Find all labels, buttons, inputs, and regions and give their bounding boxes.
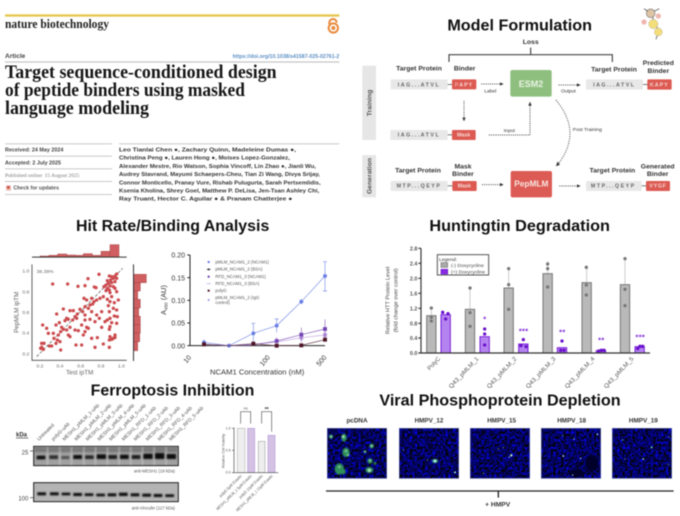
- bar chart: relative cell viability: [215, 406, 278, 512]
- bar chart: relative cell viability: 1.0: [226, 426, 231, 430]
- grey bars: [427, 274, 630, 353]
- bar chart: relative cell viability: Relative Cell Viability: [222, 434, 226, 468]
- scatter axis labels: 0.6: [77, 363, 84, 369]
- publication dates: Accepted: 2 July 2025: [5, 160, 61, 166]
- bar chart: relative cell viability: ns: [244, 406, 248, 411]
- chart legend: pMLM_NCAM1_2 (NCAM1): [215, 259, 270, 264]
- y axis title: (fold change over control): [393, 268, 399, 332]
- purple bars: [441, 315, 644, 353]
- training row: target and binder: [391, 66, 476, 89]
- generation row: target and mask: Binder: [452, 171, 474, 178]
- box: ESM2: [510, 70, 552, 97]
- x labels: Q43_pMLM_1: [448, 356, 481, 390]
- arrow: post training: [556, 100, 602, 166]
- top histogram: [32, 245, 127, 257]
- image labels: pcDNA: [346, 417, 368, 424]
- axes: [418, 248, 650, 353]
- box: PepMLM: PepMLM: [514, 179, 549, 189]
- x labels: Q43_pMLM_3: [525, 356, 558, 390]
- lane labels: MESH1_pMLM_5-uAb: [108, 403, 148, 442]
- icon: open access: [329, 19, 338, 33]
- scatter axis labels: 0.8: [98, 363, 105, 369]
- y tick labels: 0.8: [410, 321, 417, 327]
- line chart: 0.05: [171, 321, 185, 328]
- generated binder output: [586, 163, 675, 191]
- author list: Ray Truant, Hector C. Aguilar ● & Pranam Chatterjee ●: [119, 197, 292, 203]
- arrow: PepMLM output: [559, 184, 581, 188]
- side label: generation: Generation: [367, 158, 374, 194]
- image labels: HMPV_19: [629, 417, 658, 424]
- predicted binder output: IAG...ATVL: [593, 83, 636, 89]
- chart legend: pMLM_NCAM1_2 (BSA): [215, 267, 263, 272]
- lane labels: MESH1_RFD_1-uAb: [121, 405, 158, 442]
- bar chart: HTT protein level: [385, 246, 650, 390]
- scatter axis labels: 0.4: [57, 363, 64, 369]
- micrograph: HMPV_12: [399, 428, 459, 478]
- arrow: input to ESM2: Input: [504, 128, 515, 134]
- treatment bracket: [326, 491, 674, 508]
- arrow: ESM2 output: Output: [561, 89, 576, 95]
- x labels: Q43_pMLM_5: [603, 356, 636, 390]
- y tick labels: 2.8: [410, 246, 417, 252]
- masked training row: Mask: [457, 133, 470, 139]
- scatter axis labels: 0.2: [22, 351, 30, 357]
- panel: viral phosphoprotein depletion: [326, 393, 674, 508]
- scatter axis labels: 0.6: [22, 310, 30, 316]
- micrograph: HMPV_15: [470, 428, 530, 478]
- generated binder output: MTP...QEYP: [591, 184, 636, 190]
- x labels: PolyC: [427, 356, 443, 372]
- scatter axis labels: 0.4: [22, 331, 30, 337]
- author list: Audrey Stavrand, Mayumi Schaepers-Cheu, Tian Zi Wang, Divya Srijay,: [119, 172, 320, 178]
- loss bracket: [449, 48, 612, 62]
- chart legend: polyG: [215, 288, 227, 293]
- article title: Target sequence-conditioned design: [5, 62, 277, 83]
- author list: Alexander Mestre, Rio Watson, Sophia Vincoff, Lin Zhao ●, Jianli Wu,: [119, 164, 316, 170]
- line chart: 0.10: [171, 298, 185, 305]
- lane labels: polyG-uAb: [51, 421, 72, 442]
- treatment bracket: + HMPV: [485, 501, 511, 508]
- line chart: NCAM1 Concentration (nM): [210, 367, 305, 376]
- lane labels: MESH1_RFD_4-uAb: [157, 405, 194, 442]
- loss label: Loss: [523, 39, 539, 46]
- author list: [119, 148, 321, 203]
- generated binder output: VYGF: [649, 184, 667, 190]
- scatter axis labels: 0.2: [37, 363, 44, 369]
- lane labels: MESH1_RFD_5-uAb: [168, 405, 205, 442]
- generated binder output: Target Protein: [589, 167, 635, 174]
- chart legend: (+) Doxycycline: [451, 269, 485, 275]
- training row: target and binder: IAG...ATVL: [398, 82, 440, 88]
- x labels: Q43_pMLM_2: [486, 356, 519, 390]
- article title: language modeling: [5, 98, 150, 119]
- box: PepMLM: [511, 171, 552, 197]
- article title: of peptide binders using masked: [5, 80, 246, 101]
- training row: target and binder: PAPY: [455, 82, 473, 88]
- significance marks: **: [559, 327, 566, 336]
- micrograph: HMPV_19: [612, 428, 672, 478]
- training row: target and binder: Target Protein: [396, 66, 442, 73]
- predicted binder output: [586, 60, 674, 90]
- lane labels: MESH1_pMLM_2-uAb: [74, 403, 113, 442]
- panel: article header: [5, 14, 339, 203]
- generation row: target and mask: MTP...QEYP: [397, 184, 441, 190]
- heading: model formulation: Model Formulation: [447, 18, 592, 35]
- series: dark: [202, 338, 327, 347]
- y tick labels: 1.6: [410, 291, 417, 297]
- line chart: 450: [163, 302, 168, 310]
- lane labels: Untreated: [36, 423, 56, 442]
- image labels: [346, 417, 658, 424]
- y axis title: Relative HTT Protein Level: [385, 267, 391, 334]
- line chart: 0.00: [171, 343, 185, 350]
- masked training row: [390, 130, 476, 140]
- generation row: target and mask: [391, 163, 477, 191]
- side label: training: [362, 66, 376, 140]
- series: purple: [204, 319, 327, 346]
- x labels: [427, 356, 636, 390]
- author list: Leo Tianlai Chen ●, Zachary Quinn, Madeleine Dumas ●,: [119, 148, 296, 154]
- icon: mascot: [641, 9, 662, 39]
- article title: [5, 62, 277, 119]
- grey data points: [430, 257, 627, 328]
- chart legend: (-) Doxycycline: [451, 263, 484, 269]
- generation row: target and mask: Mask: [454, 163, 472, 170]
- panel: hit rate and binding analysis: [14, 218, 329, 377]
- side label: training: Training: [367, 90, 374, 116]
- line chart: [159, 253, 329, 376]
- publication dates: Received: 24 May 2024: [5, 148, 64, 154]
- significance marks: ***: [636, 332, 645, 341]
- scatter axis labels: PepMLM ipTM: [14, 292, 21, 333]
- significance marks: ***: [519, 327, 528, 336]
- y tick labels: [410, 246, 417, 357]
- y tick labels: 2.0: [410, 276, 417, 282]
- western blot: MESH1: 25: [22, 451, 29, 457]
- panel: ferroptosis inhibition: [16, 383, 278, 512]
- series: pale purple: [204, 330, 327, 346]
- author list: Connor Monticello, Pranay Vure, Rishab Pulugurta, Sarah Pertsemlidis,: [119, 180, 321, 186]
- chart legend: RFD_NCAM1_3 (BSA): [215, 281, 260, 286]
- bar chart: relative cell viability: MESH1_pMLM_1 10μM Erastin: [235, 474, 274, 512]
- western blot: vinculin: anti-Vinculin (117 kDa): [132, 505, 176, 510]
- predicted binder output: Binder: [648, 68, 669, 75]
- chart legend: [437, 255, 489, 275]
- scatter axis labels: 0.8: [22, 289, 30, 295]
- grey error bars: [431, 258, 625, 329]
- publication dates: Check for updates: [13, 186, 59, 192]
- generated binder output: Generated: [641, 163, 675, 170]
- y tick labels: 0.4: [410, 336, 417, 342]
- scatter axis labels: Test ipTM: [66, 370, 93, 377]
- scatter axis labels: 1.0: [118, 363, 125, 369]
- line chart: A: [159, 310, 168, 315]
- lane labels: MESH1_RFD_3-uAb: [145, 405, 182, 442]
- training row: target and binder: Binder: [454, 66, 476, 73]
- lane labels: MESH1_pMLM_3-uAb: [85, 403, 125, 442]
- significance marks: [483, 315, 645, 344]
- panel: model formulation: [362, 9, 675, 197]
- arrow: post training: Post Training: [573, 127, 602, 133]
- micrograph: pcDNA: [327, 428, 387, 478]
- chart legend: control): [215, 300, 230, 305]
- predicted binder output: Predicted: [643, 60, 674, 67]
- publication dates: Published online: 15 August 2025: [5, 173, 79, 179]
- y tick labels: 0.0: [410, 351, 417, 357]
- arrow: binder to ESM2: [481, 82, 504, 95]
- generated binder output: Binder: [647, 171, 669, 178]
- article label: Article: [5, 53, 26, 60]
- journal name: nature biotechnology: [5, 17, 110, 31]
- arrow: mask step: [462, 101, 466, 121]
- arrow: binder to ESM2: Label: [484, 89, 496, 95]
- chart legend: pMLM_NCAM1_2 (IgG: [215, 295, 260, 300]
- doi link: https://doi.org/10.1038/s41587-025-02761-2: [233, 54, 339, 60]
- predicted binder output: Target Protein: [591, 66, 637, 73]
- bar chart: relative cell viability: 0.0: [226, 471, 231, 475]
- heading: viral: Viral Phosphoprotein Depletion: [379, 393, 621, 410]
- lane labels: MESH1_pMLM_1-uAb: [62, 403, 101, 442]
- significance marks: *: [483, 315, 486, 324]
- arrow: ESM2 output: [559, 83, 581, 95]
- micrograph: HMPV_18: [541, 428, 601, 478]
- image labels: HMPV_18: [557, 417, 587, 424]
- significance marks: **: [598, 335, 605, 344]
- side label: generation: [362, 155, 376, 197]
- western blot: MESH1: anti-MESH1 (19 kDa): [134, 469, 176, 474]
- western blot: vinculin: [18, 483, 178, 510]
- line chart: 100: [259, 354, 272, 368]
- predicted binder output: KAPY: [650, 83, 669, 89]
- generation row: target and mask: Mask: [458, 184, 471, 190]
- line chart: 0.15: [171, 275, 185, 282]
- scatter axis labels: [14, 269, 125, 377]
- author list: Ksenia Kholina, Shrey Goel, Matthew P. DeLisa, Jen-Tsan Ashley Chi,: [119, 189, 320, 195]
- lane labels: [36, 403, 205, 442]
- lane labels: MESH1_RFD_2-uAb: [133, 405, 170, 442]
- kDa label: kDa: [16, 432, 28, 438]
- y tick labels: 1.2: [410, 306, 417, 312]
- y tick labels: 2.4: [410, 261, 417, 267]
- image labels: HMPV_15: [487, 417, 517, 424]
- box: ESM2: ESM2: [519, 79, 543, 89]
- chart legend: [207, 259, 270, 305]
- western blot: vinculin: 100: [18, 496, 29, 502]
- scatter plot: [32, 264, 127, 360]
- western blot: MESH1: [22, 446, 178, 474]
- publication dates: [5, 148, 112, 195]
- heading: huntingtin: Huntingtin Degradation: [429, 218, 610, 235]
- bar chart: relative cell viability: 0.5: [226, 448, 231, 452]
- bar chart: relative cell viability: **: [265, 407, 270, 413]
- heading: hit rate: Hit Rate/Binding Analysis: [76, 218, 269, 235]
- heading: ferroptosis: Ferroptosis Inhibition: [91, 383, 254, 400]
- scatter axis labels: 1.0: [22, 269, 30, 275]
- y axis title: [385, 267, 399, 334]
- chart legend: RFD_NCAM1_3 (NCAM1): [215, 274, 266, 279]
- x labels: Q43_pMLM_4: [564, 356, 597, 390]
- generation row: target and mask: Target Protein: [395, 167, 441, 174]
- purple data points: [441, 311, 644, 353]
- author list: Christina Peng ●, Lauren Hong ●, Moises Lopez-Gonzalez,: [119, 156, 290, 162]
- bar chart: relative cell viability: polyG 5μM Erastin: [218, 474, 243, 498]
- line chart: (AU): [159, 285, 168, 302]
- arrow: input to ESM2: [489, 102, 532, 135]
- bar chart: relative cell viability: MESH1_pMLM_1 5μM Erastin: [215, 474, 253, 511]
- panel: huntingtin degradation: [385, 218, 650, 390]
- line chart: 10: [183, 354, 193, 365]
- bar chart: relative cell viability: polyG 10μM Erastin: [238, 474, 264, 499]
- lane labels: MESH1_pMLM_4-uAb: [97, 403, 136, 442]
- series: blue: [202, 262, 327, 347]
- scatter plot: 38.39%: [37, 269, 54, 275]
- right histogram: [133, 264, 146, 361]
- masked training row: IAG...ATVL: [398, 133, 440, 139]
- image labels: HMPV_12: [415, 417, 444, 424]
- arrow: mask to PepMLM: [482, 183, 504, 186]
- chart legend: Legend:: [439, 257, 457, 263]
- line chart: 500: [316, 354, 329, 368]
- line chart: 0.20: [171, 253, 185, 260]
